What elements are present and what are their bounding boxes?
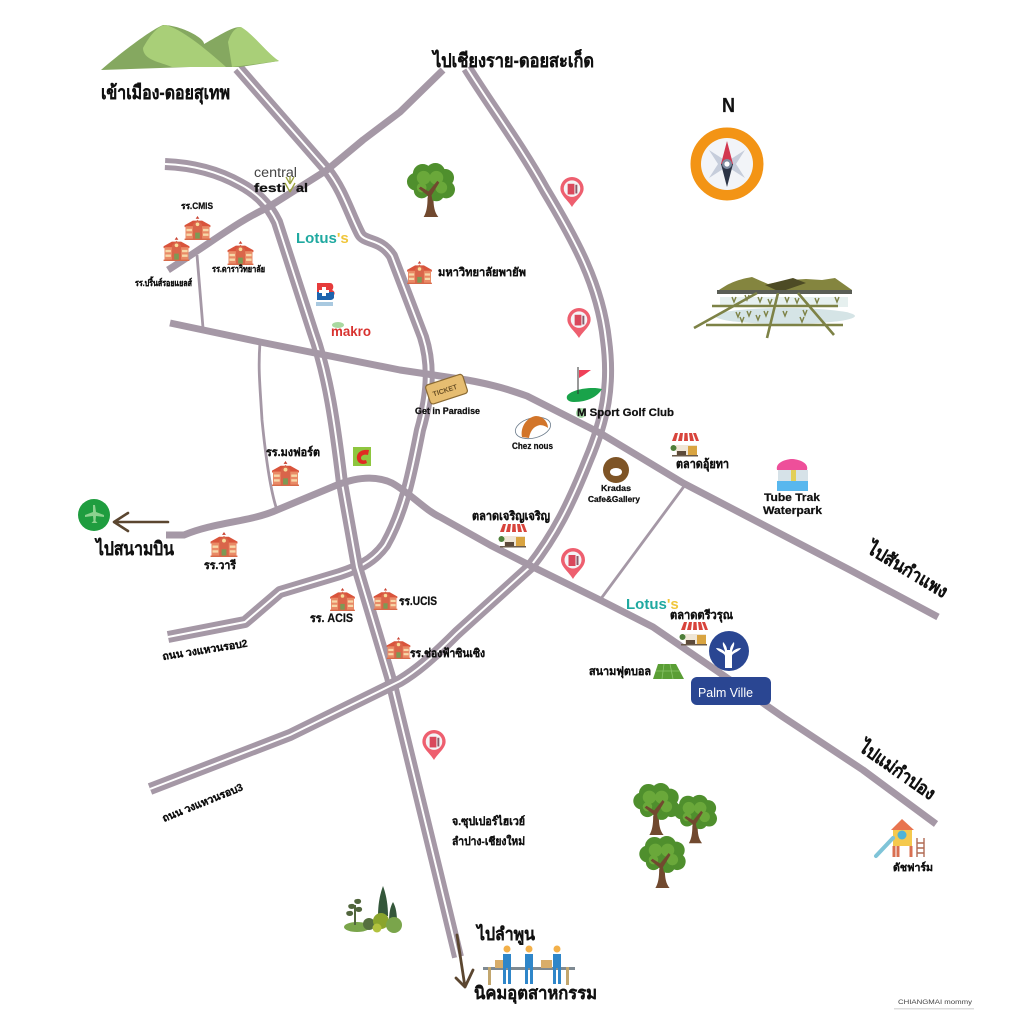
rotated road label: ring road 3: ถนน วงแหวนรอบ3: [161, 781, 245, 825]
Chez nous croissant: Chez nous: [512, 441, 553, 451]
airport icon: [78, 499, 110, 531]
school: CMIS: [181, 201, 213, 240]
Get in Paradise ticket: TICKET: [432, 384, 459, 398]
road: northern double road from Doi Suthep: [168, 68, 429, 637]
label: north: N: [722, 95, 735, 117]
road: to Chiang Rai single road: [168, 70, 443, 270]
arrow to airport: [114, 513, 168, 531]
road: central superhighway double road: [165, 164, 458, 957]
connector roads: [197, 255, 685, 600]
university: Payap: มหาวิทยาลัยพายัพ: [438, 266, 526, 279]
school: Montfort: [266, 445, 320, 486]
logo: Lotus's north: Lotus's: [296, 230, 349, 247]
school: Chong Fah: [387, 637, 485, 660]
school: Wareerak: รร.วารี: [204, 559, 237, 572]
watermark: CHIANGMAI mommy: [898, 999, 973, 1006]
logo: makro: makro: [331, 323, 371, 339]
university: Payap: [407, 261, 526, 284]
Kradas cafe: Kradas: [601, 483, 631, 493]
heading: to Lamphun: ไปลำพูน: [475, 923, 535, 946]
school: UCIS: รร.UCIS: [399, 596, 437, 608]
trees south-east: [633, 783, 717, 888]
market: Ui Tha: [670, 433, 729, 472]
Chez nous croissant: [512, 414, 553, 451]
fuel pin 1: [560, 177, 584, 207]
school: Wareerak: [204, 532, 237, 572]
school: Prince Royal: รร.ปริ้นส์รอยแยลส์: [135, 276, 192, 288]
compass: [696, 95, 758, 195]
school: Chong Fah: รร.ช่องฟ้าซินเซิง: [410, 647, 485, 660]
school: Montfort: รร.มงฟอร์ต: [266, 445, 320, 459]
Tube Trak Waterpark: [763, 459, 823, 517]
fuel pin 3: [561, 548, 585, 579]
rotated heading: to Mae Kampong: ไปแม่กำปอง: [854, 735, 940, 804]
school: CMIS: รร.CMIS: [181, 201, 213, 211]
superhighway label: จ.ซุปเปอร์ไฮเวย์: [452, 814, 525, 829]
road network: [150, 68, 938, 957]
playground and Dairy Farm: [876, 819, 933, 874]
market: Tri Warun: ตลาดตรีวรุณ: [670, 608, 733, 623]
watermark: [894, 999, 974, 1010]
school: Dara: [212, 241, 265, 274]
rotated heading: to San Kamphaeng: ไปสันกำแพง: [862, 536, 952, 602]
logo: Central Festival: al: [296, 181, 308, 195]
superhighway label: ลำปาง-เชียงใหม่: [452, 834, 525, 848]
arrow to Lamphun: [456, 935, 473, 987]
superhighway label: [452, 814, 525, 848]
Get in Paradise ticket: [415, 374, 480, 416]
heading: industrial estate: นิคมอุตสาหกรรม: [474, 983, 597, 1004]
playground and Dairy Farm: ดัชฟาร์ม: [893, 861, 933, 874]
golf club: M Sport Golf Club: [577, 407, 674, 419]
football field: [589, 664, 684, 679]
Kradas cafe: [588, 457, 640, 504]
logo: Big C: [353, 447, 371, 466]
logo: Central Festival: [254, 165, 308, 195]
mountain illustration: [101, 25, 279, 70]
Tube Trak Waterpark: Waterpark: [763, 505, 823, 517]
logo: Central Festival: festi: [254, 181, 286, 195]
Palm Ville logo: [709, 631, 749, 671]
bushes and pine trees: [344, 886, 402, 933]
logo: Central Festival: central: [254, 165, 297, 180]
fuel pin 4: [422, 730, 446, 760]
market: Charoen Charoen: [472, 509, 550, 548]
road: to Mae Kampong single road: [166, 478, 936, 824]
rice field illustration: [694, 277, 855, 338]
logo: Lotus's south: Lotus's: [626, 596, 679, 613]
road: to San Kamphaeng single road: [170, 323, 938, 617]
heading: to airport: ไปสนามบิน: [94, 537, 174, 560]
school: UCIS: [374, 588, 437, 610]
school: ACIS: [310, 588, 355, 625]
heading: to the city and Doi Suthep: เข้าเมือง-ดอยสุเทพ: [101, 82, 230, 105]
market: Tri Warun: [670, 608, 733, 646]
football field: สนามฟุตบอล: [589, 665, 651, 679]
golf club: [567, 367, 674, 419]
Tube Trak Waterpark: Tube Trak: [764, 492, 821, 504]
Kradas cafe: Cafe&Gallery: [588, 494, 640, 504]
school: Dara: รร.ดาราวิทยาลัย: [212, 264, 265, 274]
school: Prince Royal: [135, 237, 192, 288]
heading: to Chiang Rai and Doi Saket: ไปเชียงราย-ดอยสะเก็ด: [431, 48, 594, 72]
market: Ui Tha: ตลาดอุ้ยทา: [676, 457, 729, 472]
Palm Ville label: Palm Ville: [698, 686, 753, 700]
fuel pin 2: [567, 308, 591, 338]
rotated road label: ring road 2: ถนน วงแหวนรอบ2: [162, 638, 249, 663]
logo: hospital: [316, 283, 335, 306]
tree north: [407, 163, 455, 217]
Palm Ville label: [691, 677, 771, 705]
school: ACIS: รร. ACIS: [310, 613, 353, 625]
Get in Paradise ticket: Get in Paradise: [415, 406, 480, 416]
factory workers illustration: [483, 946, 575, 985]
market: Charoen Charoen: ตลาดเจริญเจริญ: [472, 509, 550, 523]
road: outer ring 3 double road: [150, 68, 608, 789]
